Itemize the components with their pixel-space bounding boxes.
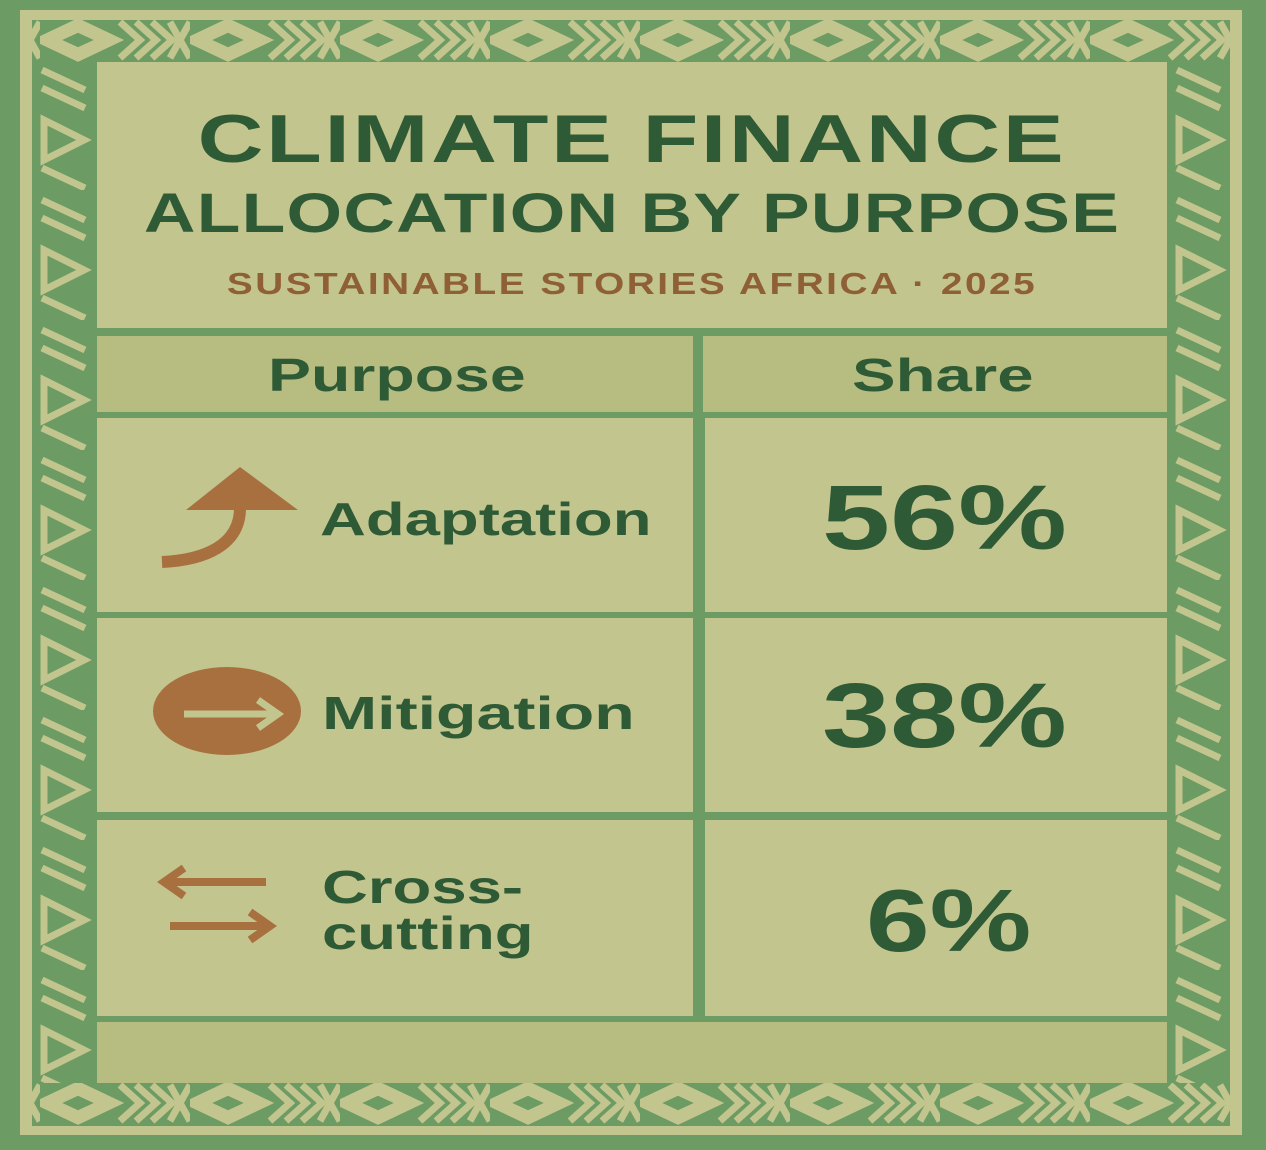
label: Cross-cutting xyxy=(322,861,534,959)
title: CLIMATE FINANCE xyxy=(198,101,1066,177)
icon: mitigation circle arrow xyxy=(153,667,301,755)
header: Purpose: Purpose xyxy=(268,349,526,401)
icon: cross-cutting arrows xyxy=(157,864,277,944)
byline: SUSTAINABLE STORIES AFRICA · 2025 xyxy=(227,266,1037,301)
icon: adaptation arrow xyxy=(162,467,298,568)
value: 38%: 38% xyxy=(822,665,1067,767)
header: Share: Share xyxy=(852,349,1034,401)
label: Adaptation: Adaptation xyxy=(320,493,651,545)
label: Cross-cutting: cutting xyxy=(322,907,534,959)
label: Cross-cutting: Cross- xyxy=(322,861,523,913)
panel xyxy=(97,62,1167,1083)
label: Mitigation: Mitigation xyxy=(322,687,635,739)
value: 56%: 56% xyxy=(822,467,1067,569)
value: 6%: 6% xyxy=(866,871,1031,970)
subtitle heading: ALLOCATION BY PURPOSE xyxy=(144,181,1120,244)
